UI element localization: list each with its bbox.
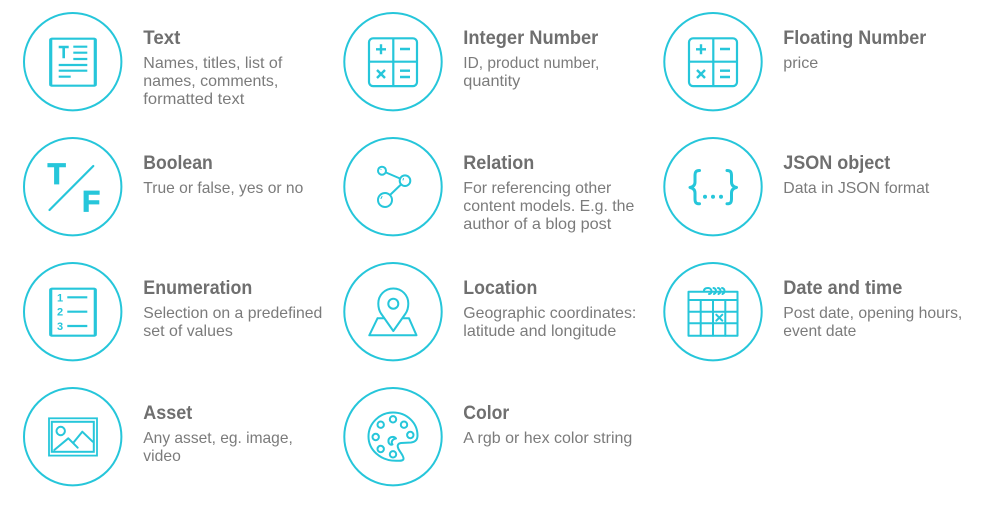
- icon: text document: [24, 13, 121, 110]
- description: set of values: [143, 323, 233, 340]
- heading: Floating Number: [783, 27, 927, 49]
- description: price: [783, 55, 818, 72]
- description: For referencing other: [463, 180, 612, 197]
- description: [463, 305, 636, 340]
- card: Asset: [24, 388, 293, 485]
- heading: Boolean: [143, 152, 213, 174]
- heading: Location: [463, 277, 537, 299]
- heading: Relation: [463, 152, 534, 174]
- heading: Asset: [143, 402, 193, 424]
- description: video: [143, 448, 181, 465]
- description: [143, 55, 283, 108]
- icon: calendar: [664, 263, 762, 360]
- heading: Enumeration: [143, 277, 252, 299]
- card: Integer Number: [344, 13, 599, 110]
- card: Relation: [344, 138, 634, 235]
- icon: connected nodes: [344, 138, 442, 235]
- card: Floating Number: [664, 13, 927, 110]
- card: Enumeration: [24, 263, 322, 360]
- heading: JSON object: [783, 152, 891, 174]
- heading: Text: [143, 27, 181, 49]
- description: Names, titles, list of: [143, 55, 283, 72]
- card: JSON object: [664, 138, 930, 235]
- icon: numbered list: 2: [57, 307, 63, 319]
- description: ID, product number,: [463, 55, 599, 72]
- icon: true / false: [24, 138, 121, 235]
- icon: calculator: [664, 13, 762, 110]
- card: Date and time: [664, 263, 962, 360]
- description: [143, 430, 293, 465]
- description: Geographic coordinates:: [463, 305, 636, 322]
- card: Text: [24, 13, 283, 110]
- icon: true / false: F: [82, 186, 100, 219]
- description: [143, 305, 322, 340]
- description: [783, 305, 962, 340]
- description: [463, 180, 634, 233]
- card: Color: [344, 388, 632, 485]
- description: author of a blog post: [463, 216, 612, 233]
- icon: map pin: [344, 263, 442, 360]
- description: names, comments,: [143, 73, 278, 90]
- icon: framed image: [24, 388, 121, 485]
- icon: calculator: [344, 13, 442, 110]
- description: event date: [783, 323, 856, 340]
- description: Any asset, eg. image,: [143, 430, 293, 447]
- description: latitude and longitude: [463, 323, 616, 340]
- description: Data in JSON format: [783, 180, 930, 197]
- description: content models. E.g. the: [463, 198, 634, 215]
- heading: Integer Number: [463, 27, 599, 49]
- icon: paint palette: [344, 388, 442, 485]
- description: Post date, opening hours,: [783, 305, 962, 322]
- icon: curly braces: [664, 138, 762, 235]
- description: Selection on a predefined: [143, 305, 322, 322]
- icon: numbered list: [24, 263, 121, 360]
- description: quantity: [463, 73, 520, 90]
- description: [463, 55, 599, 90]
- description: True or false, yes or no: [143, 180, 303, 197]
- description: formatted text: [143, 91, 245, 108]
- icon: numbered list: 3: [57, 321, 63, 333]
- heading: Color: [463, 402, 510, 424]
- description: A rgb or hex color string: [463, 430, 632, 447]
- heading: Date and time: [783, 277, 902, 299]
- card: Boolean: [24, 138, 303, 235]
- icon: numbered list: 1: [57, 292, 63, 304]
- card: Location: [344, 263, 636, 360]
- icon: true / false: T: [48, 158, 66, 191]
